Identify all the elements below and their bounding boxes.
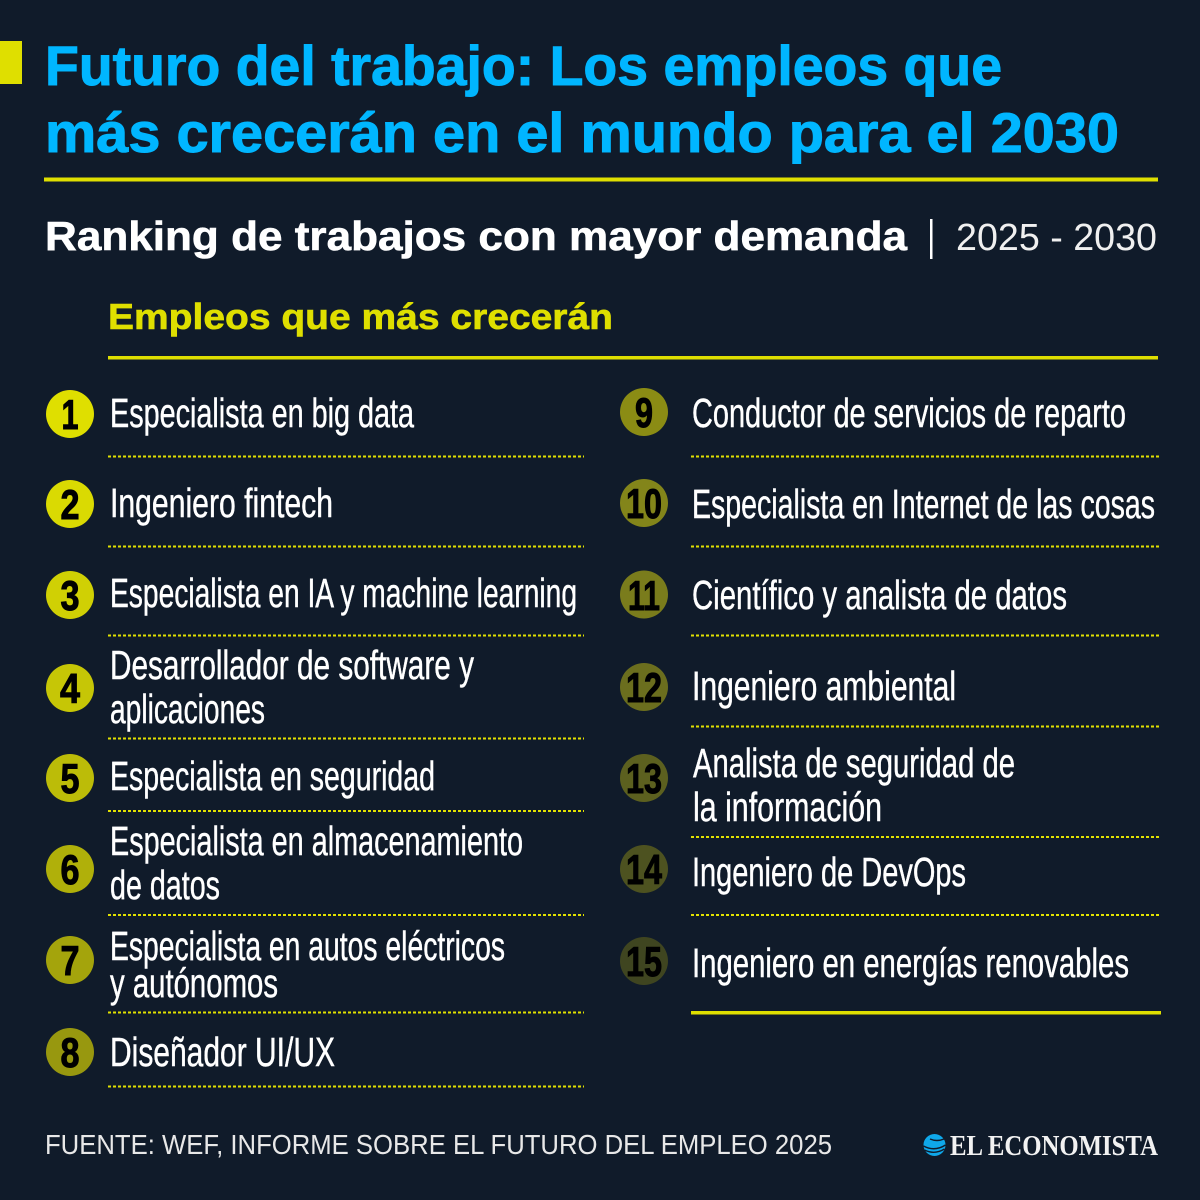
item 7: Especialista en autos eléctricos	[110, 923, 505, 969]
item 8: Diseñador UI/UX	[110, 1029, 335, 1075]
item 14: 14	[626, 846, 662, 893]
item 4: aplicaciones	[110, 686, 265, 732]
item 12	[620, 663, 956, 711]
title	[45, 34, 1119, 164]
panel: right ranking column	[620, 388, 1161, 1014]
subtitle: 2025 - 2030	[956, 217, 1157, 259]
item 2: 2	[60, 481, 80, 528]
logo: El Economista: EL ECONOMISTA	[950, 1130, 1158, 1162]
item 1: 1	[62, 391, 78, 438]
item 6	[46, 818, 523, 908]
accent bar	[0, 41, 22, 84]
item 8	[46, 1028, 335, 1076]
subtitle: Ranking de trabajos con mayor demanda	[45, 213, 908, 259]
item 14	[620, 845, 966, 895]
item 7: 7	[60, 937, 80, 984]
item 13	[620, 740, 1015, 830]
item 8: 8	[60, 1029, 80, 1076]
item 13: Analista de seguridad de	[693, 740, 1015, 786]
item 12: 12	[626, 664, 662, 711]
item 3	[46, 570, 577, 619]
item 15: 15	[626, 938, 662, 985]
title: Futuro del trabajo: Los empleos que	[45, 34, 1002, 97]
item 11	[620, 570, 1067, 619]
item 11: 11	[628, 572, 660, 619]
item 6: 6	[60, 846, 80, 893]
item 9: 9	[635, 389, 653, 436]
icon: globe	[924, 1134, 946, 1156]
item 13: 13	[626, 755, 662, 802]
item 5	[46, 753, 435, 802]
item 4	[46, 642, 474, 732]
item 3: Especialista en IA y machine learning	[110, 570, 577, 616]
item 1: Especialista en big data	[110, 390, 414, 436]
item 7	[46, 923, 505, 1006]
item 4: 4	[60, 665, 81, 712]
item 4: Desarrollador de software y	[110, 642, 474, 688]
item 2: Ingeniero fintech	[110, 480, 333, 526]
item 5: 5	[60, 755, 80, 802]
item 6: Especialista en almacenamiento	[110, 818, 523, 864]
section heading: Empleos que más crecerán	[108, 296, 613, 337]
item 10: 10	[626, 480, 662, 527]
item 12: Ingeniero ambiental	[692, 663, 956, 709]
item 3: 3	[60, 572, 80, 619]
item 5: Especialista en seguridad	[110, 753, 435, 799]
item 2	[46, 480, 333, 528]
item 13: la información	[693, 784, 882, 830]
item 1	[46, 390, 414, 438]
item 14: Ingeniero de DevOps	[692, 849, 966, 895]
title: más crecerán en el mundo para el 2030	[45, 101, 1119, 164]
item 7: y autónomos	[110, 960, 278, 1006]
source: FUENTE: WEF, INFORME SOBRE EL FUTURO DEL EMPLEO 2025	[45, 1129, 832, 1160]
item 6: de datos	[110, 862, 220, 908]
panel: left ranking column	[46, 390, 584, 1086]
